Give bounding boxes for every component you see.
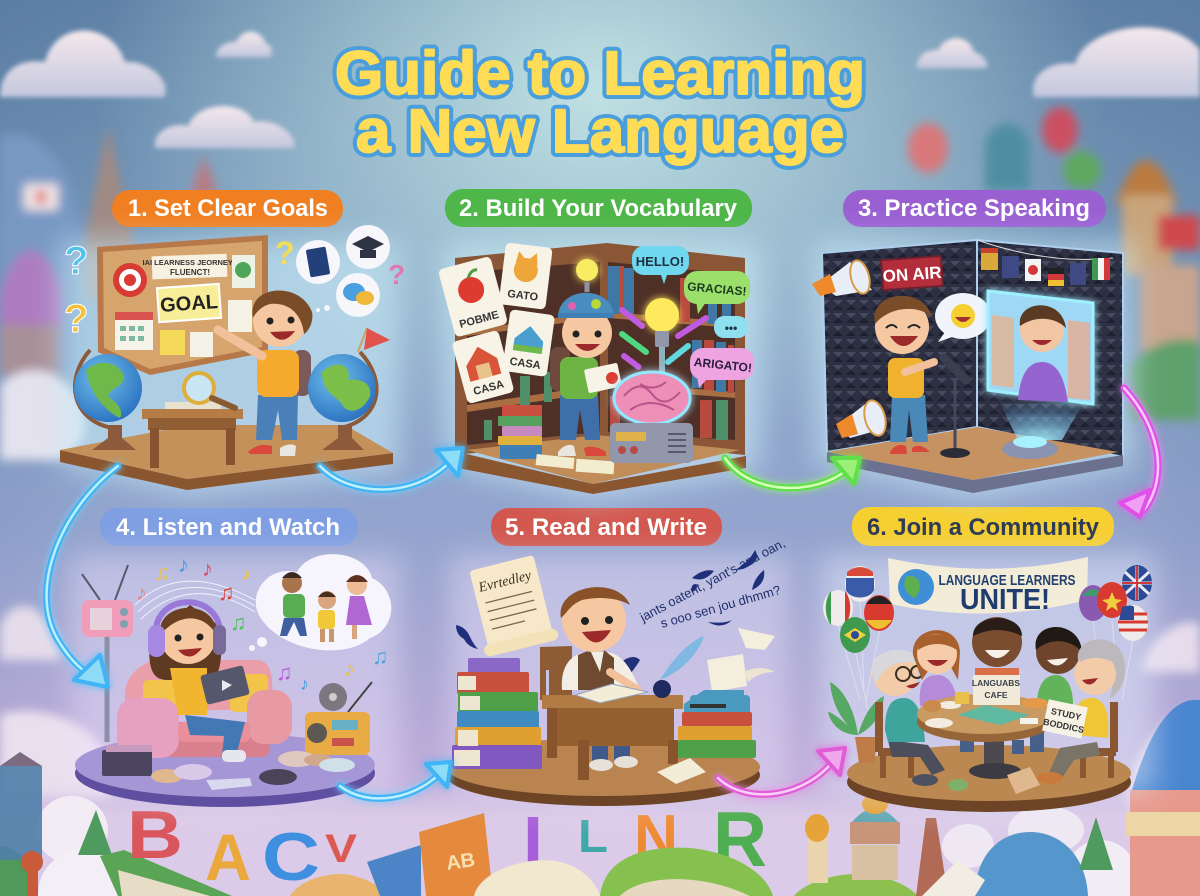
title: Guide to Learning [335,39,865,107]
alphabet letters: C [262,819,320,895]
music notes and staff: ♫ [276,660,292,685]
panel: build your vocabulary [438,242,760,500]
music notes and staff [135,552,388,694]
right book stack [678,712,756,758]
study buddies sign [1041,699,1089,739]
arrow: step 5 to step 6 [718,748,845,794]
right globe with flag [308,328,390,450]
arrow: step 1 to step 4 [47,466,118,687]
corkboard [97,235,268,375]
arrow: step 1 to step 2 [320,448,463,489]
room and bookshelves [455,243,745,455]
legs and shoes under desk [589,745,638,771]
floor card decks [536,454,614,474]
neon word strips [622,310,706,368]
hologram video call [988,291,1093,459]
speech bubble: hello: HELLO! [636,254,684,269]
couch [117,656,292,758]
wooden platform [60,425,393,490]
left tower [0,752,43,896]
title: a New Language [356,97,844,165]
writing desk [542,684,683,780]
vocabulary cards: POBME [458,309,500,331]
purple platform [75,733,375,807]
vocabulary cards [438,242,555,404]
chair [540,646,607,770]
boy writing [561,587,640,690]
on air sign [881,256,943,290]
heading: step 1 [112,190,343,227]
child with cards and bulb helmet [550,259,622,456]
corkboard: FLUENCT! [170,268,210,277]
vocabulary cards: CASA [472,378,505,398]
languages cafe sign: CAFE [984,690,1008,700]
megaphones [812,258,889,438]
desk and magnifier [142,373,243,468]
study buddies sign: BODDICS [1042,717,1085,735]
music notes and staff: ♪ [242,564,251,584]
heading: step 5 [491,508,722,546]
heading: step 6 [852,507,1114,546]
speech bubble: hello [632,246,689,284]
radio and film reel [305,682,372,755]
blue book [367,845,421,896]
child pointing at board [218,290,312,456]
thought bubble with dancing children [249,554,391,651]
languages cafe sign [972,675,1020,705]
flying ink and words: jants oatent, yant's and oan, [636,535,788,625]
green book [100,850,232,896]
question marks: ? [64,297,88,341]
community members [872,617,1125,786]
alphabet letters: B [127,797,183,873]
corkboard: GOAL [159,291,219,317]
arrow: step 4 to step 5 [340,762,451,798]
speech bubble: gracias: GRACIAS! [687,279,747,299]
left globe [74,350,142,450]
open book [474,848,773,896]
music notes and staff: ♪ [178,552,189,577]
heading: step 6: 6. Join a Community [867,514,1100,541]
panel: listen and watch [70,552,400,810]
balloons left [823,566,894,710]
heading: step 4: 4. Listen and Watch [116,514,340,541]
speech bubble: dots [714,316,748,338]
orange book with AB: AB [445,849,477,875]
title: a New Language [356,97,844,165]
vocabulary cards: GATO [507,288,539,304]
music notes and staff: ♪ [202,556,213,581]
alphabet letters: I [523,802,543,880]
parchment scroll: Evrtedley [476,568,534,596]
note on floor [657,758,706,784]
speech bubble: dots: ••• [725,321,737,335]
music notes and staff: ♫ [230,610,246,635]
question marks [64,235,405,341]
speech bubble: gracias [684,271,750,314]
wooden floor [458,435,746,494]
balloons right [1079,565,1152,700]
alphabet letters: V [325,827,357,871]
music notes and staff: ♫ [154,560,170,585]
studio stage [822,240,1123,493]
thought bubbles with icons [296,225,390,317]
cafe table with board game [917,692,1053,779]
alphabet letters: R [713,795,767,883]
title: Guide to Learning [335,39,865,107]
discs and albums [102,745,355,790]
small town [805,700,1200,896]
panel: practice speaking [812,240,1135,500]
gift box [948,767,1040,794]
lightbulb [645,298,679,372]
speech bubble: arigato [690,348,754,388]
alphabet letters: L [578,810,608,862]
ink bottle and feather [653,636,704,698]
parchment scroll [464,554,559,658]
arrow: step 3 to step 6 [1120,388,1158,517]
heading: step 4 [100,508,358,546]
panel: join a community [820,555,1155,815]
laughing emoji bubble [935,293,991,342]
typewriter [684,654,775,716]
alphabet letters: A [205,820,251,894]
chairs [875,702,1118,778]
retro tv on pole [82,565,133,742]
question marks: ? [275,235,295,271]
glowing brain machine [610,372,693,463]
corkboard: IAI LEARNESS JEORNEY? [142,258,238,267]
alphabet letters [127,795,767,895]
wooden platform [446,738,760,806]
speech bubble: arigato: ARIGATO! [693,355,753,375]
flying ink and words: s ooo sen jou dhmm? [659,582,782,631]
study buddies sign: STUDY [1050,706,1082,722]
title [335,39,865,165]
flags bunting [977,240,1113,286]
panel: set clear goals [60,225,405,495]
child speaking [874,296,934,454]
microphone [940,358,970,458]
girl with headphones and tablet [148,602,250,762]
music notes and staff: ♪ [344,656,355,681]
alphabet letters: N [634,803,678,872]
music notes and staff: ♫ [372,644,388,669]
question marks: ? [64,239,88,283]
music notes and staff: ♪ [300,674,309,694]
heading: step 2: 2. Build Your Vocabulary [459,195,738,222]
community banner: UNITE! [960,584,1050,616]
community banner [888,557,1088,616]
heading: step 2 [445,189,752,227]
heading: step 1: 1. Set Clear Goals [128,195,328,222]
clouds and ground [0,780,1200,896]
heading: step 3: 3. Practice Speaking [858,195,1090,222]
music notes and staff: ♫ [218,580,234,605]
arrow: step 2 to step 3 [725,458,860,488]
orange book with AB [419,813,493,896]
left book stack [452,658,542,769]
question marks: ? [388,259,405,290]
vocabulary cards: CASA [509,356,541,372]
heading: step 3 [843,190,1106,227]
community banner: LANGUAGE LEARNERS [938,572,1076,589]
panel: read and write [446,535,790,812]
flying ink and words [456,535,788,696]
bottom alphabet landscape [0,700,1200,896]
plant [828,682,884,763]
round platform [847,745,1131,812]
on air sign: ON AIR [882,263,942,286]
music notes and staff: ♪ [136,580,147,605]
heading: step 5: 5. Read and Write [505,514,707,541]
stacked books [498,405,542,459]
languages cafe sign: LANGUABS [972,678,1020,688]
